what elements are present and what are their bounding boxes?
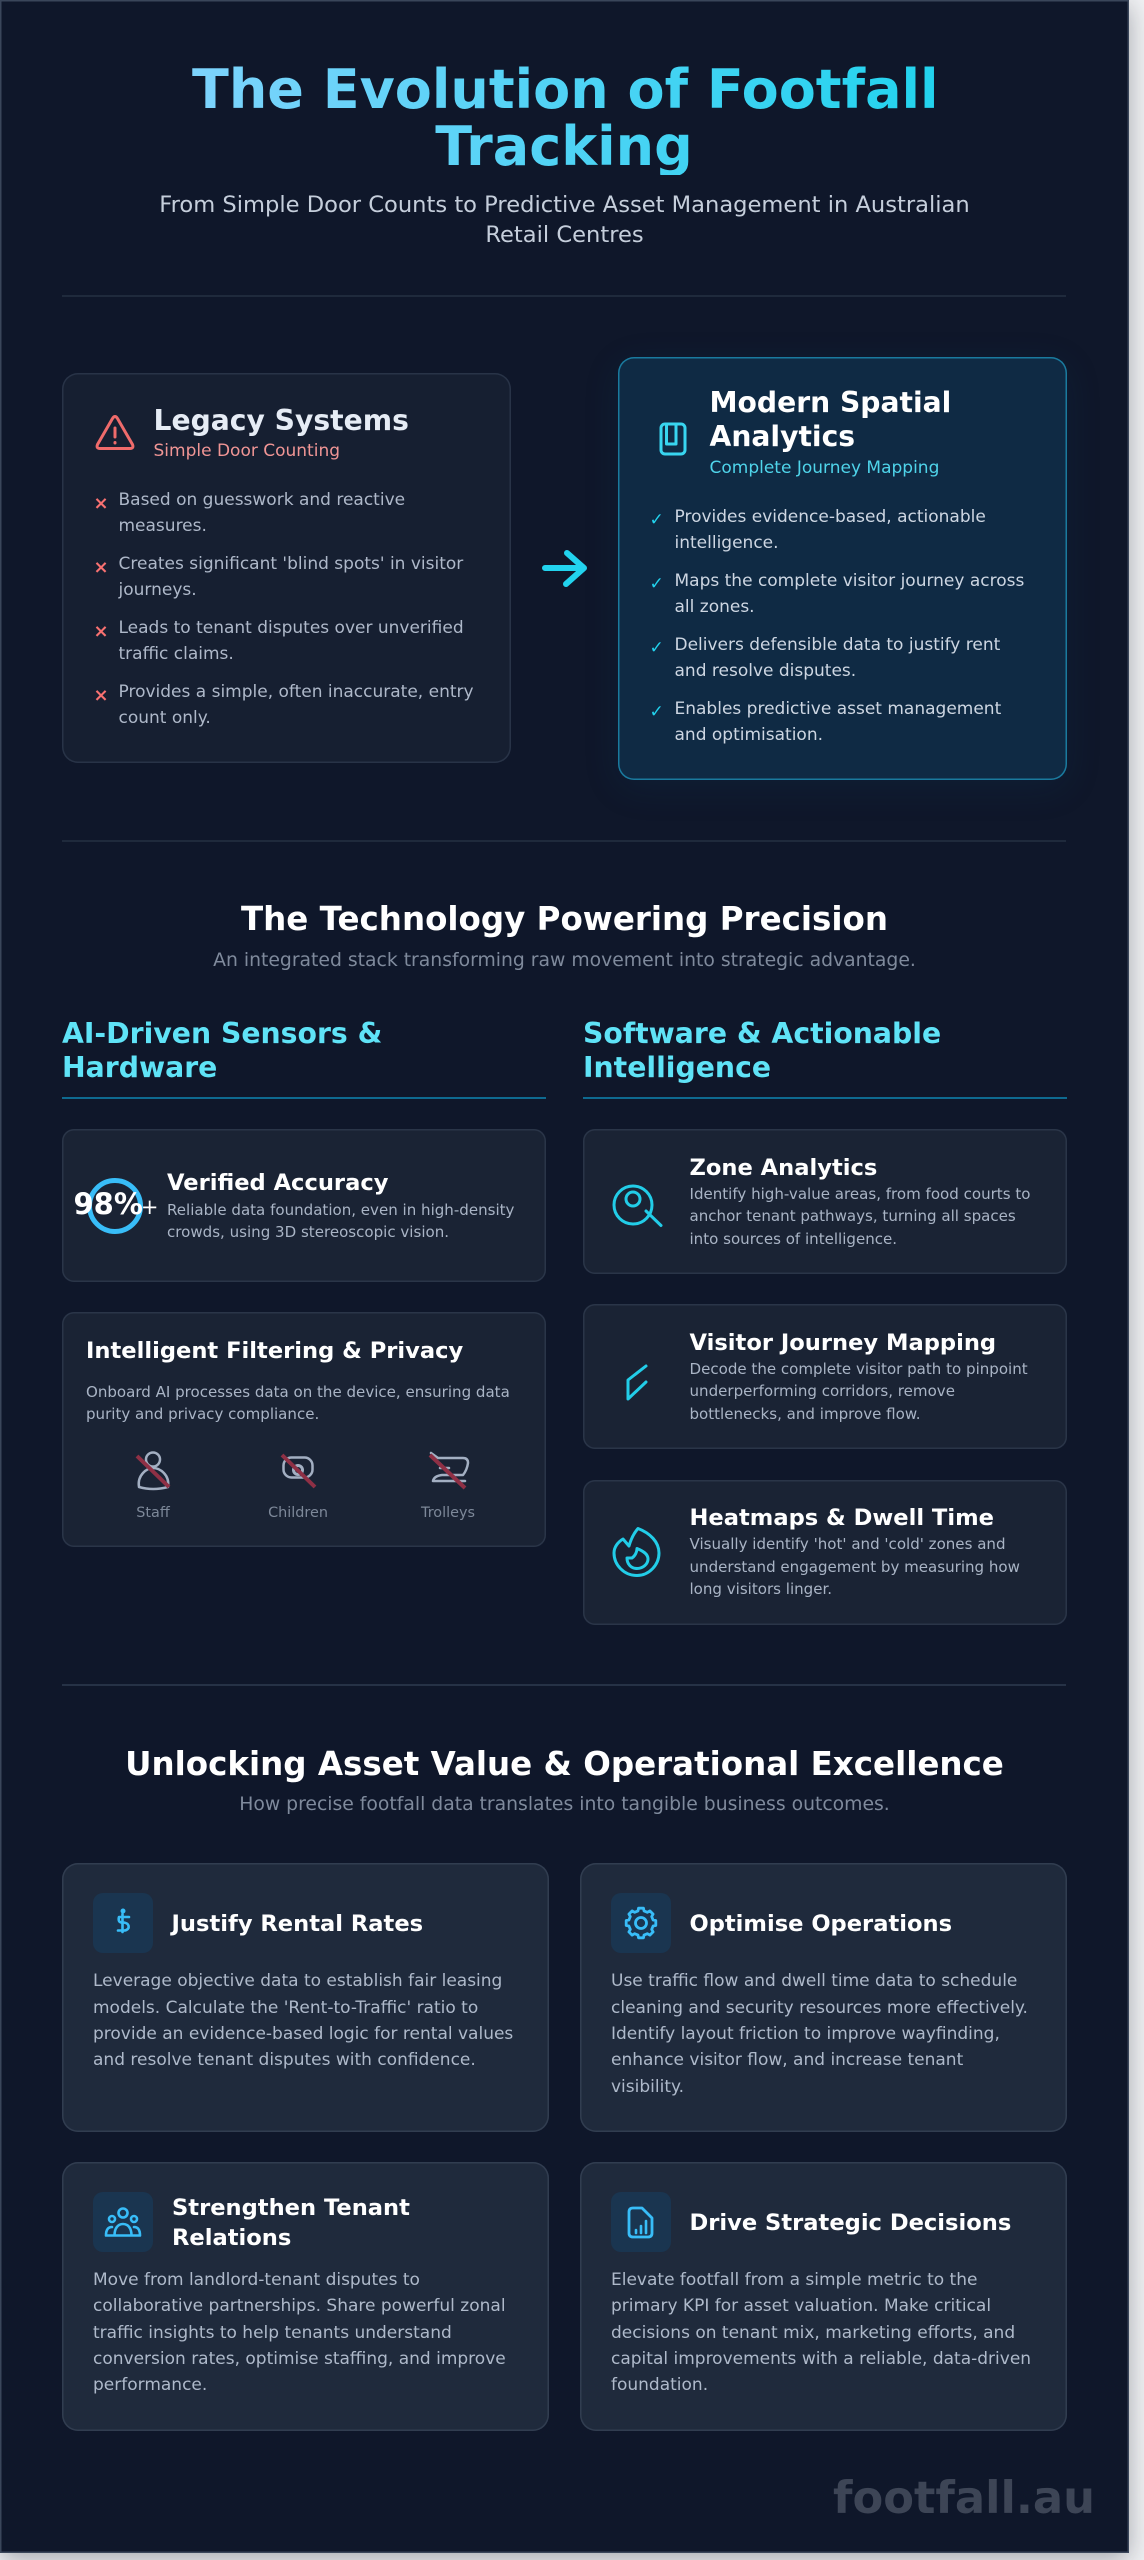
list item: Creates significant 'blind spots' in visitor xyxy=(118,554,463,574)
card text xyxy=(167,1200,514,1241)
panel: verified accuracy xyxy=(62,1129,546,1282)
panel: justify rental rates xyxy=(62,1863,549,2132)
list item xyxy=(650,699,1001,745)
panel: modern spatial analytics xyxy=(618,357,1067,780)
list item xyxy=(650,507,986,553)
list item: all zones. xyxy=(674,597,755,617)
card text: primary KPI for asset valuation. Make critical xyxy=(611,2296,991,2316)
icon: zone search xyxy=(612,1184,663,1228)
card text: performance. xyxy=(93,2375,207,2395)
panel: intelligent filtering xyxy=(62,1312,546,1547)
panel: optimise operations xyxy=(580,1863,1067,2132)
icon: trolley crossed out xyxy=(428,1452,470,1490)
list item: count only. xyxy=(118,708,211,728)
label: Staff xyxy=(136,1505,170,1521)
card text: purity and privacy compliance. xyxy=(86,1405,319,1423)
card text xyxy=(611,1971,1028,2097)
card text: understand engagement by measuring how xyxy=(690,1558,1020,1576)
card text: visibility. xyxy=(611,2077,684,2097)
list item: journeys. xyxy=(118,580,197,600)
label: Trolleys xyxy=(421,1505,475,1521)
card text: enhance visitor flow, and increase tenant xyxy=(611,2050,963,2070)
card text: Use traffic flow and dwell time data to schedule xyxy=(611,1971,1017,1991)
filter item: staff xyxy=(136,1451,170,1521)
icon: children crossed out xyxy=(280,1454,316,1488)
list item xyxy=(94,554,464,600)
panel: modern spatial analytics: ✓ xyxy=(650,702,664,722)
list item: Leads to tenant disputes over unverified xyxy=(118,618,464,638)
card text: Visually identify 'hot' and 'cold' zones and xyxy=(690,1535,1006,1553)
card text: conversion rates, optimise staffing, and improve xyxy=(93,2349,506,2369)
title xyxy=(192,62,936,175)
icon: device xyxy=(660,422,686,456)
heading: modern spatial analytics: Modern Spatial xyxy=(710,386,951,419)
column heading: sensors: Hardware xyxy=(62,1051,217,1084)
heading: technology section: The Technology Powering Precision xyxy=(241,900,888,938)
title: Tracking xyxy=(435,115,693,178)
card text xyxy=(93,2270,506,2395)
list item: traffic claims. xyxy=(118,644,234,664)
list item: Enables predictive asset management xyxy=(674,699,1001,719)
panel: heatmaps and dwell time xyxy=(583,1480,1067,1625)
filter item: children xyxy=(268,1454,328,1521)
title: The Evolution of Footfall xyxy=(192,58,939,121)
card text: Onboard AI processes data on the device, ensuring data xyxy=(86,1382,510,1400)
icon: document chart xyxy=(611,2192,671,2252)
column heading: sensors xyxy=(62,1017,382,1084)
panel: zone analytics xyxy=(583,1129,1067,1274)
list item: measures. xyxy=(118,516,207,536)
subheading: technology section: An integrated stack transforming raw movement into strategic advantage. xyxy=(213,950,916,971)
label: Children xyxy=(268,1505,328,1521)
card text: decisions on tenant mix, marketing efforts, and xyxy=(611,2323,1015,2343)
panel: legacy systems: × xyxy=(94,493,109,514)
card text: anchor tenant pathways, turning all spaces xyxy=(690,1207,1016,1225)
footer brand: footfall.au xyxy=(833,2470,1095,2524)
filter item: trolleys xyxy=(421,1452,475,1521)
card text: cleaning and security resources more effectively. xyxy=(611,1998,1028,2018)
panel: legacy systems: × xyxy=(94,557,109,578)
card text xyxy=(611,2270,1031,2395)
heading: legacy systems: Legacy Systems xyxy=(154,404,409,436)
arrow xyxy=(542,550,587,587)
card text xyxy=(690,1185,1030,1248)
subheading: simple door counting: Simple Door Counting xyxy=(154,441,340,461)
list item: Provides a simple, often inaccurate, entry xyxy=(118,682,474,702)
card text: capital improvements with a reliable, data-driven xyxy=(611,2349,1031,2369)
panel: modern spatial analytics: ✓ xyxy=(650,638,664,658)
card text: long visitors linger. xyxy=(690,1580,832,1598)
subheading: value section: How precise footfall data translates into tangible business outcomes. xyxy=(239,1794,890,1815)
panel: legacy systems: × xyxy=(94,685,109,706)
card text: foundation. xyxy=(611,2375,708,2395)
list item: intelligence. xyxy=(674,533,779,553)
panel: strengthen tenant relations xyxy=(62,2162,549,2431)
list item: Based on guesswork and reactive xyxy=(118,490,405,510)
panel: visitor journey mapping xyxy=(583,1304,1067,1449)
column heading: sensors: AI-Driven Sensors & xyxy=(62,1017,382,1050)
card text: Move from landlord-tenant disputes to xyxy=(93,2270,420,2290)
icon: accuracy ring xyxy=(87,1178,143,1234)
card title: Visitor Journey Mapping xyxy=(690,1330,996,1356)
card text: Decode the complete visitor path to pinpoint xyxy=(690,1360,1028,1378)
icon: gear xyxy=(611,1893,671,1953)
list item: Provides evidence-based, actionable xyxy=(674,507,986,527)
heading: modern spatial analytics: Analytics xyxy=(710,420,855,453)
list item xyxy=(650,635,1000,681)
subtitle xyxy=(159,192,970,248)
panel: legacy systems: × xyxy=(94,621,109,642)
card text xyxy=(690,1360,1028,1423)
card title: Optimise Operations xyxy=(690,1911,952,1937)
card text: Reliable data foundation, even in high-density xyxy=(167,1200,514,1218)
card text xyxy=(93,1971,513,2070)
card text: and resolve tenant disputes with confidence. xyxy=(93,2050,476,2070)
card title: Justify Rental Rates xyxy=(172,1911,423,1937)
card text: traffic insights to help tenants understand xyxy=(93,2323,452,2343)
card text: Identify high-value areas, from food courts to xyxy=(690,1185,1030,1203)
card text: crowds, using 3D stereoscopic vision. xyxy=(167,1223,449,1241)
card text xyxy=(86,1382,510,1423)
icon: warning triangle xyxy=(96,415,134,450)
card title: Intelligent Filtering & Privacy xyxy=(86,1338,463,1364)
card title: Zone Analytics xyxy=(690,1155,877,1181)
card text: bottlenecks, and improve flow. xyxy=(690,1405,921,1423)
panel: drive strategic decisions xyxy=(580,2162,1067,2431)
list item xyxy=(94,490,405,536)
card text: underperforming corridors, remove xyxy=(690,1382,955,1400)
panel: modern spatial analytics: ✓ xyxy=(650,510,664,530)
list item: and optimisation. xyxy=(674,725,823,745)
icon: dollar xyxy=(93,1893,153,1953)
card title: Heatmaps & Dwell Time xyxy=(690,1504,994,1530)
icon: staff crossed out xyxy=(136,1451,170,1490)
list: legacy drawbacks xyxy=(94,490,474,728)
column heading: software xyxy=(583,1017,941,1084)
list item xyxy=(94,618,464,664)
card text: Identify layout friction to improve wayfinding, xyxy=(611,2024,1000,2044)
subtitle: Retail Centres xyxy=(485,222,644,248)
card text: models. Calculate the 'Rent-to-Traffic' ratio to xyxy=(93,1998,478,2018)
card title: Verified Accuracy xyxy=(167,1170,388,1196)
card title: Relations xyxy=(172,2225,291,2251)
card text: collaborative partnerships. Share powerful zonal xyxy=(93,2296,506,2316)
column heading: software: Intelligence xyxy=(583,1051,771,1084)
card text: provide an evidence-based logic for rental values xyxy=(93,2024,513,2044)
panel: modern spatial analytics: ✓ xyxy=(650,574,664,594)
card title: Drive Strategic Decisions xyxy=(690,2210,1011,2236)
card title: Strengthen Tenant xyxy=(172,2195,410,2221)
card title xyxy=(172,2195,410,2251)
stat: 98 percent: 98%+ xyxy=(74,1187,159,1221)
heading: value section: Unlocking Asset Value & Operational Excellence xyxy=(125,1745,1004,1783)
panel: legacy systems xyxy=(62,373,511,763)
list item xyxy=(94,682,474,728)
subheading: complete journey mapping: Complete Journey Mapping xyxy=(710,458,939,478)
icon: flame xyxy=(612,1527,660,1577)
card text: Leverage objective data to establish fair leasing xyxy=(93,1971,502,1991)
heading: modern spatial analytics xyxy=(710,386,951,453)
subtitle: From Simple Door Counts to Predictive Asset Management in Australian xyxy=(159,192,970,218)
list item xyxy=(650,571,1024,617)
list item: and resolve disputes. xyxy=(674,661,856,681)
list: modern benefits xyxy=(650,507,1024,745)
icon: people xyxy=(93,2192,153,2252)
list item: Delivers defensible data to justify rent xyxy=(674,635,1000,655)
column heading: software: Software & Actionable xyxy=(583,1017,941,1050)
card text: into sources of intelligence. xyxy=(690,1230,897,1248)
card text: Elevate footfall from a simple metric to the xyxy=(611,2270,977,2290)
card text xyxy=(690,1535,1020,1598)
list item: Maps the complete visitor journey across xyxy=(674,571,1024,591)
icon: journey path xyxy=(626,1364,648,1400)
